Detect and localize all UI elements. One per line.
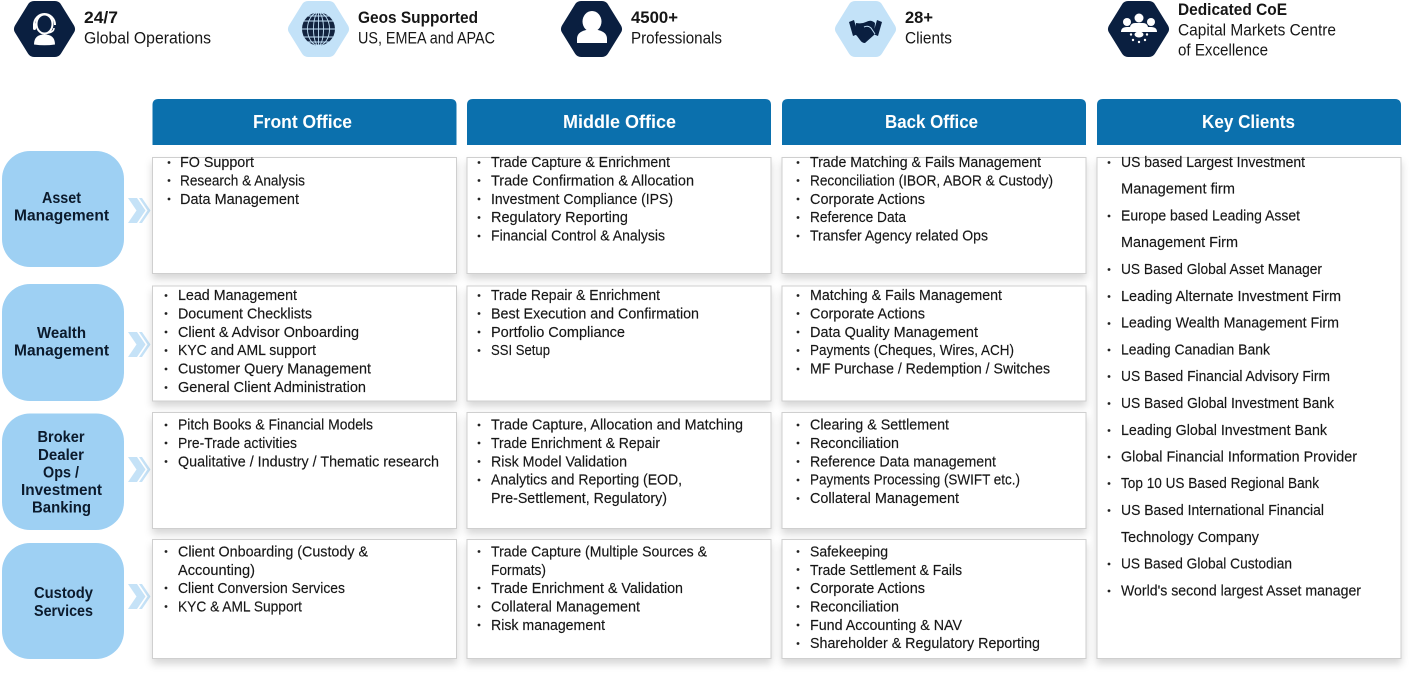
panel: Custody Services / Back Office: Reconciliation — [810, 598, 899, 616]
panel: Wealth Management / Front Office: General Client Administration — [178, 379, 366, 396]
panel: Wealth Management / Back Office: Corporate Actions — [810, 306, 925, 322]
panel: Key Clients list: Europe based Leading Asset — [1121, 208, 1301, 224]
stat: dedicated centre of excellence: of Excellence — [1178, 42, 1268, 60]
row label: Broker Dealer Ops / Investment Banking: Ops / — [43, 464, 79, 482]
panel: Asset Management / Back Office: Transfer Agency related Ops — [810, 228, 988, 244]
panel: Wealth Management / Front Office: Customer Query Management — [178, 360, 372, 378]
stat: geos supported: Geos Supported — [358, 9, 478, 27]
panel: Asset Management / Middle Office: Investment Compliance (IPS) — [491, 191, 673, 208]
panel: Custody Services / Back Office: Trade Settlement & Fails — [810, 562, 962, 579]
panel: Key Clients list: Leading Wealth Management Firm — [1121, 314, 1339, 332]
panel: Broker Dealer / Back Office: Collateral Management — [810, 490, 960, 507]
panel: Custody Services / Back Office — [782, 540, 1086, 658]
panel: Asset Management / Middle Office — [467, 154, 771, 274]
panel: Wealth Management / Middle Office: Best Execution and Confirmation — [491, 306, 699, 322]
arrow: Broker Dealer — [128, 457, 150, 482]
column header: Key Clients — [1097, 99, 1401, 145]
panel: Key Clients list: US based Largest Investment — [1121, 154, 1306, 171]
row label: Custody Services: Custody — [34, 585, 93, 602]
panel: Custody Services / Front Office: Accounting) — [178, 562, 255, 579]
column header: Front Office: Front Office — [253, 112, 352, 132]
panel: Key Clients list: Leading Canadian Bank — [1121, 342, 1270, 358]
panel: Wealth Management / Back Office — [782, 286, 1086, 401]
panel: Custody Services / Front Office: KYC & AML Support — [178, 598, 303, 616]
stat: dedicated centre of excellence — [1115, 1, 1336, 60]
panel: Key Clients list: Global Financial Information Provider — [1121, 448, 1357, 466]
stat: 4500+ professionals: 4500+ — [631, 9, 678, 27]
column header: Key Clients: Key Clients — [1202, 112, 1295, 132]
stat: 24/7 global operations: Global Operations — [84, 30, 211, 48]
panel: Wealth Management / Front Office: Lead Management — [178, 287, 298, 304]
row label: Asset Management: Management — [14, 208, 110, 224]
panel: Broker Dealer / Front Office — [152, 412, 456, 528]
panel: Key Clients list: US Based Financial Advisory Firm — [1121, 368, 1330, 385]
panel: Broker Dealer / Back Office: Clearing & Settlement — [810, 416, 950, 434]
row label: Broker Dealer Ops / Investment Banking: Dealer — [38, 447, 84, 464]
panel: Broker Dealer / Front Office: Pitch Books & Financial Models — [178, 416, 373, 434]
row label: Asset Management — [2, 151, 124, 267]
panel: Broker Dealer / Middle Office: Trade Enrichment & Repair — [491, 435, 660, 452]
panel: Custody Services / Middle Office — [467, 540, 771, 658]
panel: Custody Services / Front Office: Client Conversion Services — [178, 580, 345, 597]
panel: Key Clients list: Leading Alternate Investment Firm — [1121, 288, 1341, 305]
stat: dedicated centre of excellence: Dedicated CoE — [1178, 1, 1287, 19]
panel: Key Clients list: Management firm — [1121, 180, 1235, 198]
panel: Broker Dealer / Middle Office: Trade Capture, Allocation and Matching — [491, 416, 743, 434]
column header: Back Office: Back Office — [885, 112, 978, 132]
arrow: Wealth Management — [128, 332, 150, 357]
arrow: Asset Management — [128, 198, 150, 223]
panel: Asset Management / Middle Office: Regulatory Reporting — [491, 209, 628, 226]
panel: Wealth Management / Back Office: Data Quality Management — [810, 324, 979, 341]
panel: Broker Dealer / Front Office: Pre-Trade activities — [178, 435, 297, 452]
panel: Asset Management / Front Office: Data Management — [180, 191, 300, 208]
panel: Broker Dealer / Back Office: Reconciliation — [810, 435, 899, 452]
panel: Asset Management / Front Office — [152, 154, 456, 274]
panel: Asset Management / Front Office: Research & Analysis — [180, 172, 305, 190]
stat: geos supported — [295, 8, 495, 50]
panel: Asset Management / Middle Office: Trade Capture & Enrichment — [491, 154, 671, 171]
icon: handshake hexagon — [842, 8, 889, 50]
column header: Middle Office: Middle Office — [563, 112, 676, 132]
panel: Broker Dealer / Back Office: Payments Processing (SWIFT etc.) — [810, 472, 1020, 489]
stat: 24/7 global operations — [21, 8, 211, 50]
panel: Custody Services / Middle Office: Formats) — [491, 562, 546, 579]
column header: Middle Office — [467, 99, 771, 145]
stat: 4500+ professionals: Professionals — [631, 30, 722, 48]
panel: Key Clients list: US Based Global Custodian — [1121, 556, 1292, 572]
panel: Broker Dealer / Front Office: Qualitative / Industry / Thematic research — [178, 453, 439, 470]
panel: Custody Services / Back Office: Corporate Actions — [810, 580, 925, 597]
panel: Asset Management / Back Office: Reference Data — [810, 209, 907, 226]
panel: Broker Dealer / Middle Office: Pre-Settlement, Regulatory) — [491, 490, 667, 507]
stat: 28+ clients: 28+ — [905, 9, 933, 27]
panel: Wealth Management / Middle Office: Trade Repair & Enrichment — [491, 287, 661, 304]
panel: Asset Management / Back Office — [782, 154, 1086, 274]
row label: Wealth Management — [2, 284, 124, 401]
panel: Wealth Management / Middle Office: SSI Setup — [491, 342, 550, 359]
panel: Custody Services / Middle Office: Collateral Management — [491, 598, 641, 616]
panel: Broker Dealer / Back Office: Reference Data management — [810, 453, 997, 470]
panel: Asset Management / Middle Office: Financial Control & Analysis — [491, 228, 665, 244]
panel: Key Clients list: US Based Global Investment Bank — [1121, 395, 1334, 412]
panel: Custody Services / Middle Office: Risk management — [491, 617, 606, 634]
panel: Key Clients list: Leading Global Investment Bank — [1121, 422, 1327, 439]
panel: Key Clients list — [1097, 154, 1401, 658]
icon: globe hexagon — [295, 8, 342, 50]
panel: Asset Management / Back Office: Reconciliation (IBOR, ABOR & Custody) — [810, 172, 1053, 190]
panel: Custody Services / Middle Office: Trade Enrichment & Validation — [491, 580, 683, 597]
panel: Broker Dealer / Back Office — [782, 412, 1086, 528]
panel: Custody Services / Front Office — [152, 540, 456, 658]
stat: 24/7 global operations: 24/7 — [84, 9, 118, 27]
row label: Wealth Management: Wealth — [37, 325, 86, 342]
panel: Custody Services / Front Office: Client Onboarding (Custody & — [178, 544, 368, 560]
panel: Asset Management / Front Office: FO Support — [180, 154, 255, 171]
row label: Broker Dealer Ops / Investment Banking: Banking — [32, 500, 91, 516]
panel: Custody Services / Back Office: Shareholder & Regulatory Reporting — [810, 635, 1040, 652]
stat: geos supported: US, EMEA and APAC — [358, 30, 495, 48]
panel: Wealth Management / Front Office: Document Checklists — [178, 306, 312, 322]
panel: Wealth Management / Front Office: Client & Advisor Onboarding — [178, 324, 359, 341]
panel: Key Clients list: Top 10 US Based Regional Bank — [1121, 475, 1319, 492]
panel: Key Clients list: Management Firm — [1121, 234, 1238, 251]
icon: headset agent hexagon — [21, 8, 68, 50]
row label: Asset Management: Asset — [42, 190, 82, 207]
arrow: Custody Services — [128, 584, 150, 609]
panel: Key Clients list: Technology Company — [1121, 529, 1259, 546]
panel: Wealth Management / Front Office: KYC and AML support — [178, 342, 317, 359]
stat: dedicated centre of excellence: Capital Markets Centre — [1178, 22, 1336, 40]
row label: Wealth Management: Management — [14, 342, 110, 360]
stat: 28+ clients: Clients — [905, 30, 952, 48]
panel: Asset Management / Middle Office: Trade Confirmation & Allocation — [491, 172, 694, 190]
panel: Custody Services / Middle Office: Trade Capture (Multiple Sources & — [491, 544, 707, 560]
row label: Custody Services — [2, 543, 124, 659]
stat: 4500+ professionals — [568, 8, 722, 50]
panel: Broker Dealer / Middle Office — [467, 412, 771, 528]
row label: Broker Dealer Ops / Investment Banking: Investment — [21, 482, 103, 499]
panel: Wealth Management / Back Office: MF Purchase / Redemption / Switches — [810, 360, 1050, 378]
row label: Broker Dealer Ops / Investment Banking: Broker — [38, 429, 84, 446]
row label: Custody Services: Services — [34, 603, 93, 620]
column header: Front Office — [152, 99, 456, 145]
panel: Key Clients list: US Based International Financial — [1121, 502, 1324, 519]
panel: Custody Services / Back Office: Safekeeping — [810, 544, 888, 560]
column header: Back Office — [782, 99, 1086, 145]
panel: Custody Services / Back Office: Fund Accounting & NAV — [810, 617, 962, 634]
panel: Broker Dealer / Middle Office: Analytics and Reporting (EOD, — [491, 472, 682, 489]
panel: Broker Dealer / Middle Office: Risk Model Validation — [491, 453, 627, 470]
panel: Wealth Management / Front Office — [152, 286, 456, 401]
icon: team hexagon — [1115, 8, 1162, 50]
panel: Key Clients list: US Based Global Asset Manager — [1121, 261, 1322, 278]
panel: Asset Management / Back Office: Corporate Actions — [810, 191, 925, 208]
stat: 28+ clients — [842, 8, 952, 50]
panel: Asset Management / Back Office: Trade Matching & Fails Management — [810, 154, 1042, 171]
panel: Wealth Management / Middle Office — [467, 286, 771, 401]
panel: Wealth Management / Middle Office: Portfolio Compliance — [491, 324, 625, 341]
panel: Key Clients list: World's second largest Asset manager — [1121, 582, 1361, 600]
panel: Wealth Management / Back Office: Matching & Fails Management — [810, 287, 1003, 304]
icon: person hexagon — [568, 8, 615, 50]
panel: Wealth Management / Back Office: Payments (Cheques, Wires, ACH) — [810, 342, 1014, 359]
row label: Broker Dealer Ops / Investment Banking — [2, 414, 124, 530]
